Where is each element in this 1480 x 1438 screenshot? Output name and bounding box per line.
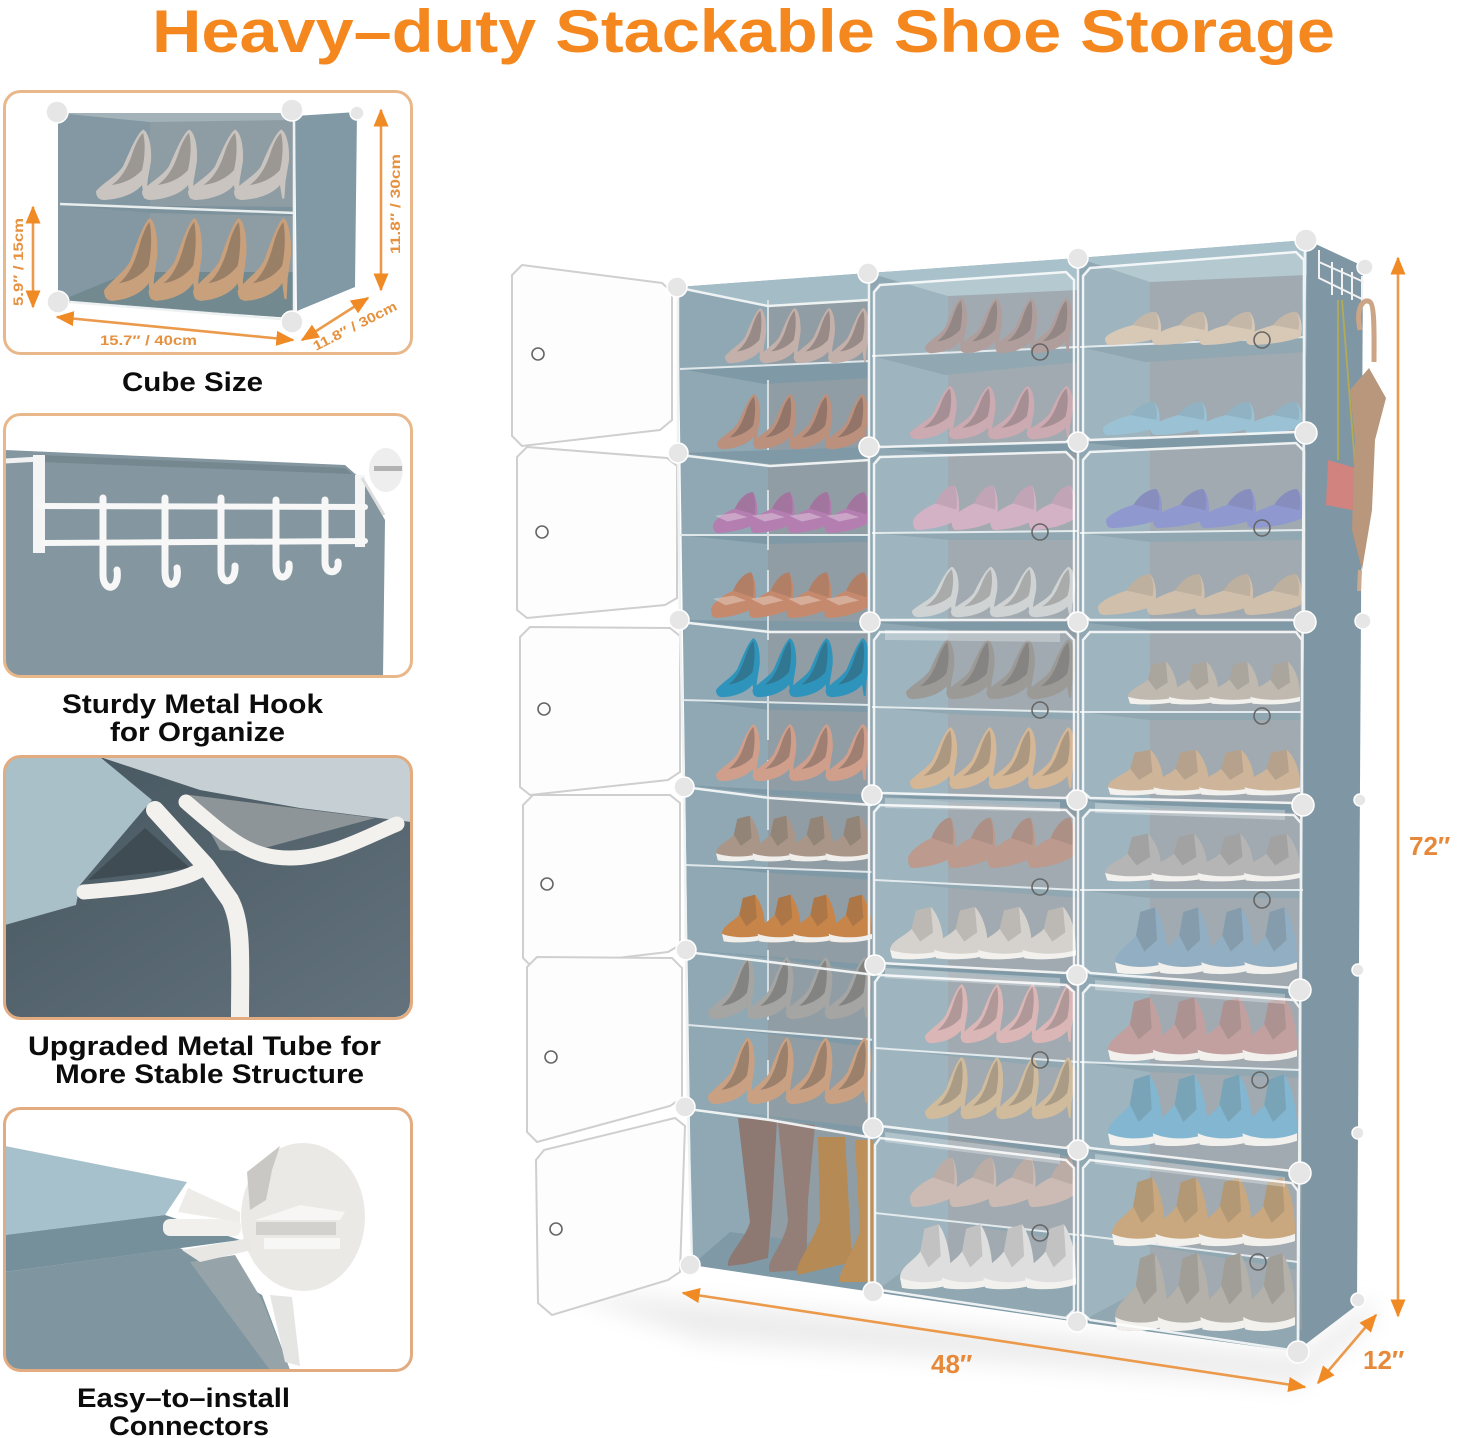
rack connectors [667, 229, 1373, 1363]
umbrella [1350, 301, 1386, 591]
arrow: rack height [1397, 258, 1399, 1316]
dimension: depth: 11.8″ / 30cm [311, 299, 399, 354]
caption: connectors: Easy–to–install [77, 1383, 290, 1413]
shoes: column 1 [708, 308, 873, 1282]
dimension: height: 11.8″ / 30cm [388, 154, 403, 254]
rack column 2 [869, 258, 1078, 1322]
boots [728, 1118, 873, 1282]
caption: metal hook: Sturdy Metal Hook [62, 689, 324, 719]
caption: metal hook [62, 689, 324, 747]
rack frame tubes [678, 240, 1305, 1352]
panel: metal hook [4, 414, 412, 677]
caption: metal tube: Upgraded Metal Tube for [28, 1031, 382, 1061]
shoes: column 2 [890, 298, 1076, 1289]
arrow: width 15.7 in [57, 317, 293, 340]
connector [362, 448, 403, 515]
arrow: rack depth [1318, 1315, 1376, 1383]
handbag with chain [1326, 300, 1362, 512]
cube illustration [46, 99, 364, 333]
white tubes [84, 802, 397, 1020]
caption: connectors [77, 1383, 290, 1438]
connector knob [163, 1143, 365, 1366]
side hook rack [1319, 250, 1364, 304]
arrow: depth 11.8 in [302, 298, 368, 340]
floor shadow [560, 1290, 1375, 1385]
caption: metal hook: for Organize [110, 717, 285, 747]
arrow: rack width [683, 1293, 1305, 1387]
translucent doors: column 2 [874, 272, 1074, 1318]
rack column 1 [678, 273, 875, 1292]
dimension: 12 in: 12″ [1363, 1345, 1404, 1375]
dimension: width: 15.7″ / 40cm [100, 333, 197, 348]
hook rack [33, 455, 365, 587]
open doors [512, 265, 685, 1315]
door pull rings [532, 332, 1270, 1270]
title: Heavy–duty Stackable Shoe Storage [152, 0, 1335, 65]
dimension: 72 in: 72″ [1409, 831, 1450, 861]
panel: metal tube [4, 756, 412, 1020]
shoes: column 3 [1098, 312, 1303, 1331]
translucent doors: column 3 [1083, 252, 1304, 1350]
panel: cube size [4, 92, 412, 354]
side panel of rack [1298, 240, 1363, 1350]
arrow: height 11.8 in [380, 110, 382, 290]
arrow: shelf height 5.9 in [32, 207, 34, 307]
caption: metal tube [28, 1031, 382, 1089]
caption: cube size: Cube Size [122, 367, 263, 397]
dimension: shelf height: 5.9″ / 15cm [11, 218, 26, 306]
dimension: 48 in: 48″ [931, 1349, 972, 1379]
panel: connectors [4, 1108, 412, 1370]
rack column 3 [1078, 240, 1307, 1352]
caption: metal tube: More Stable Structure [55, 1059, 364, 1089]
